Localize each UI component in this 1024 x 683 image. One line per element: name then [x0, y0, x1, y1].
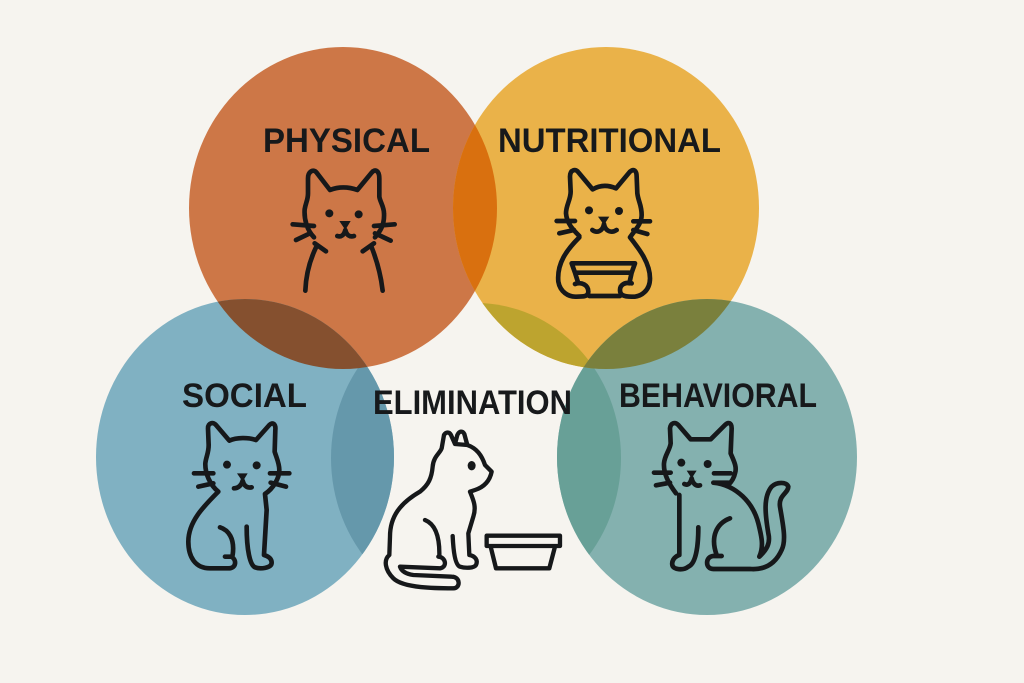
- icon: nutritional cat with bowl: [557, 170, 650, 297]
- overlap: physical and social: [218, 299, 368, 369]
- overlap: social and elimination: [331, 360, 394, 554]
- overlap: nutritional and elimination: [482, 303, 594, 368]
- icon: physical cat: [293, 171, 395, 291]
- overlap: nutritional and behavioral: [584, 299, 731, 369]
- circle: nutritional: [453, 47, 759, 369]
- icon: elimination cat with litter tray: [386, 432, 560, 588]
- heading: elimination: ELIMINATION: [373, 384, 572, 422]
- circle: behavioral: [557, 299, 857, 615]
- heading: nutritional: NUTRITIONAL: [498, 122, 721, 160]
- heading: behavioral: BEHAVIORAL: [619, 377, 817, 415]
- heading: social: SOCIAL: [182, 377, 307, 415]
- circle: physical: [189, 47, 497, 369]
- heading: physical: PHYSICAL: [263, 122, 430, 160]
- icon: behavioral cat: [654, 423, 788, 569]
- overlap: physical and nutritional: [453, 125, 497, 291]
- icon: social cat: [188, 423, 289, 568]
- circle: social: [96, 299, 394, 615]
- overlap: behavioral and elimination: [557, 367, 621, 555]
